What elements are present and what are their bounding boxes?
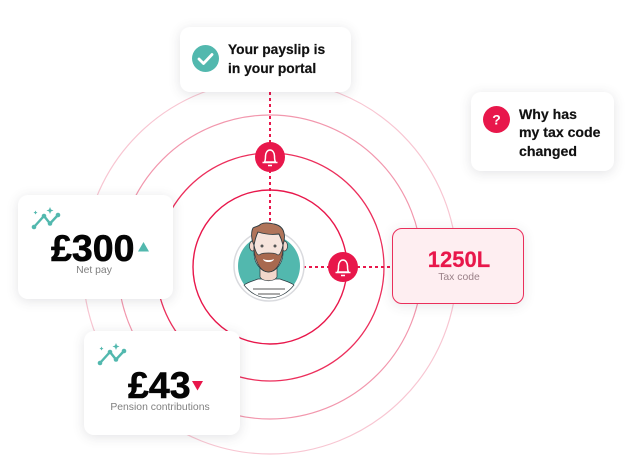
pension value: £43 — [128, 364, 191, 406]
tax code value: 1250L — [428, 247, 490, 272]
bell marker: right — [328, 252, 358, 282]
card: tax code question — [471, 92, 614, 171]
question text: my tax code — [519, 124, 600, 140]
card: tax code — [392, 228, 524, 304]
payslip text — [228, 42, 325, 76]
card: payslip notification — [180, 27, 351, 92]
icon: question mark — [483, 106, 510, 133]
pension label: Pension contributions — [110, 402, 210, 413]
card: net pay — [18, 195, 173, 299]
icon: sparkle trend line — [32, 207, 60, 230]
avatar: bearded man — [233, 222, 305, 302]
card: pension contributions — [84, 331, 240, 435]
net pay label: Net pay — [76, 265, 112, 276]
question text: Why has — [519, 106, 577, 122]
icon: green check — [192, 45, 219, 72]
bell marker: top — [255, 142, 285, 172]
up arrow — [138, 242, 149, 252]
payslip text: in your portal — [228, 60, 316, 76]
tax code label: Tax code — [438, 272, 480, 283]
net pay value: £300 — [51, 227, 134, 269]
payslip text: Your payslip is — [228, 42, 325, 57]
icon: sparkle trend line — [98, 343, 126, 366]
down arrow — [192, 381, 203, 390]
icon: question mark: ? — [492, 112, 501, 128]
question text — [518, 106, 600, 160]
question text: changed — [519, 143, 577, 159]
